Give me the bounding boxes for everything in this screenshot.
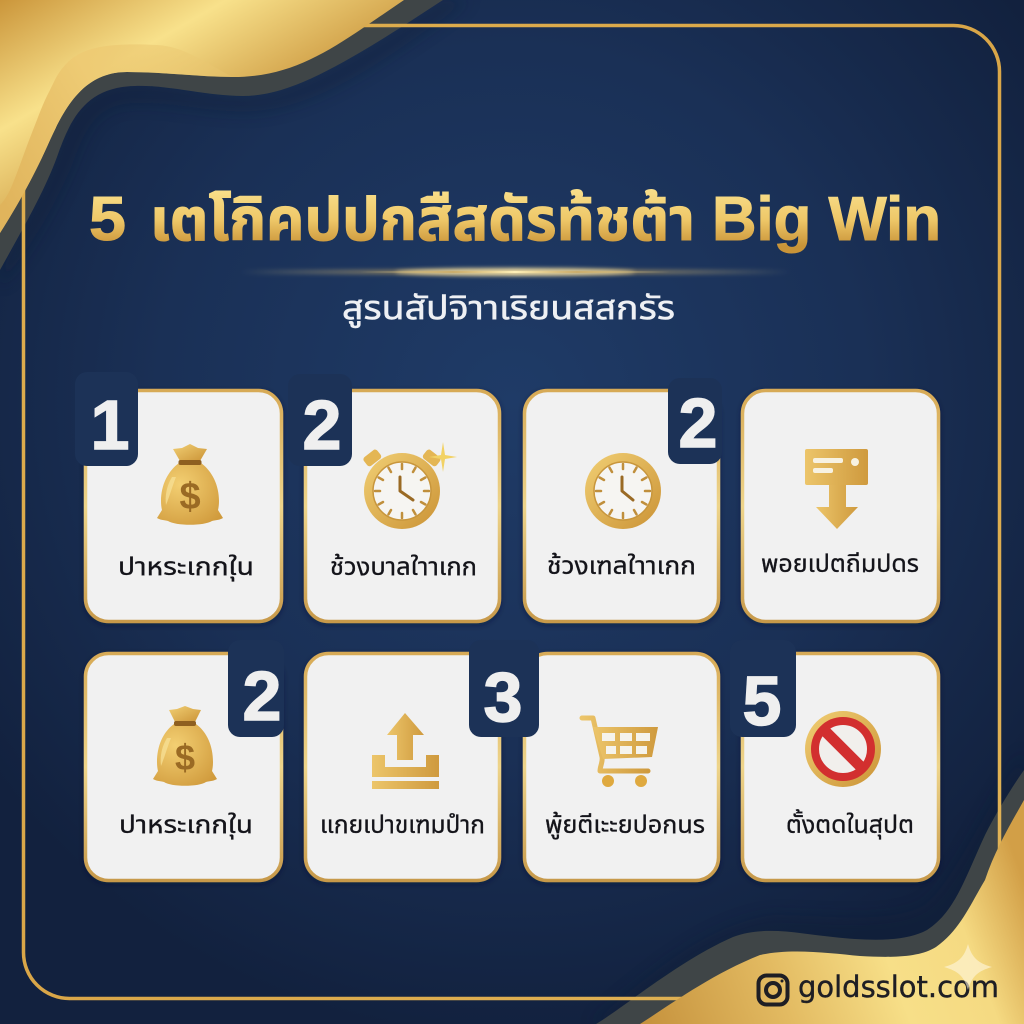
title: เตโกิคปปกสืสดัรท้ชต้า	[150, 186, 695, 253]
panel: card 8: 5	[743, 662, 781, 740]
label: ตั้งตดในสุปต	[786, 808, 914, 840]
panel: card 7: 3	[484, 658, 522, 736]
icon: clock	[585, 453, 661, 529]
top-left gold wave	[0, 0, 404, 233]
icon: prohibited sign	[805, 711, 881, 787]
panel: card 2	[288, 374, 500, 622]
panel: card 3: 2	[679, 384, 717, 462]
icon: sparkle	[944, 944, 992, 990]
subtitle: สูรนสัปจิาาเริยนสสกรัร	[342, 289, 675, 328]
icon: money bag	[157, 444, 223, 525]
icon: money bag: $	[175, 737, 195, 778]
panel: card 5: 2	[243, 657, 281, 735]
label: พู้ยตีเะะยปอกนร	[545, 811, 705, 840]
label: พอยเปตถีมปดร	[761, 550, 919, 578]
panel: card 8	[730, 640, 938, 880]
panel: card 1: 1	[91, 386, 129, 464]
icon: money bag: $	[179, 476, 201, 518]
icon: alarm clock	[362, 442, 457, 529]
panel: card 1	[75, 372, 282, 622]
icon: money bag	[153, 706, 217, 786]
bottom-right gold wave	[640, 800, 1024, 1024]
icon: shopping cart	[582, 718, 658, 787]
label: ช้วงบาลใาาเกก	[330, 553, 477, 581]
label: ปาหระเกกใุน	[118, 553, 254, 582]
panel: card 4	[742, 390, 938, 622]
title: Big Win	[712, 185, 941, 254]
icon: upload tray	[372, 713, 439, 789]
bottom-right wave shadow and grey band	[590, 750, 1024, 1024]
panel: card 7	[469, 640, 718, 880]
panel: card 6	[306, 654, 500, 880]
panel: card 2: 2	[303, 386, 341, 464]
title: 5	[89, 185, 126, 254]
top-left wave shadow and grey band	[0, 0, 470, 286]
icon: instagram	[758, 976, 788, 1004]
label: ช้วงเฑลใาาเกก	[547, 552, 696, 580]
label: แกยเปาขเฑมปำก	[320, 811, 485, 839]
divider glow	[240, 268, 790, 276]
panel: card 3	[524, 378, 722, 622]
title	[89, 185, 941, 254]
panel: card 5	[86, 640, 284, 880]
website: goldsslot.com	[798, 970, 999, 1004]
icon: ticket with down arrow	[805, 449, 868, 529]
label: ปาหระเกกใุน	[119, 811, 253, 840]
